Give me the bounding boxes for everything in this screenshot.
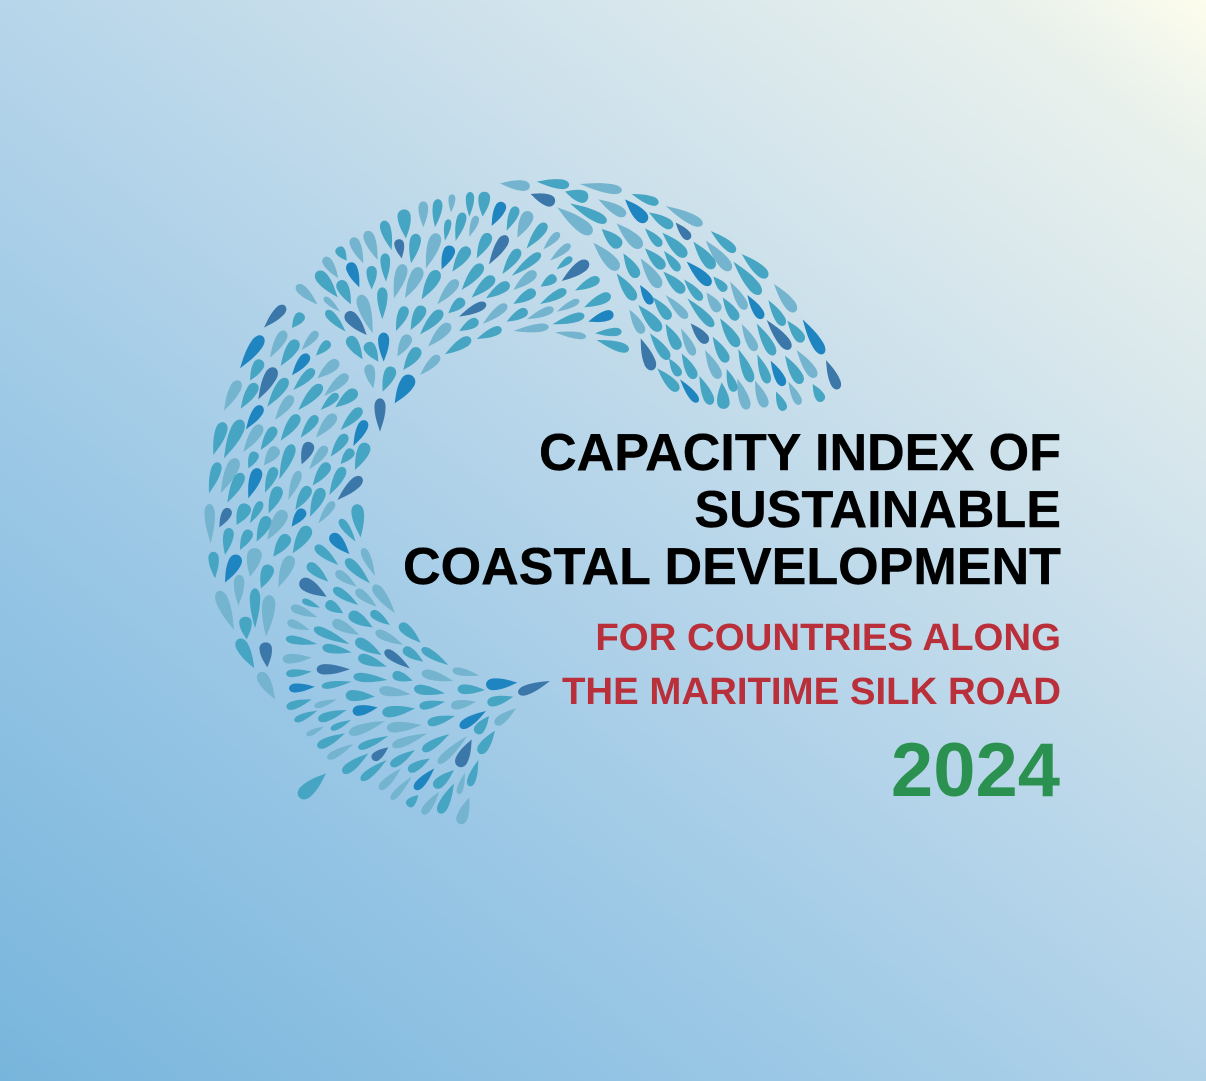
icon: circular swirl of water drops xyxy=(204,177,843,826)
subtitle: FOR COUNTRIES ALONG xyxy=(595,616,1061,659)
subtitle: THE MARITIME SILK ROAD xyxy=(562,670,1061,713)
subtitle xyxy=(562,616,1061,713)
title: COASTAL DEVELOPMENT xyxy=(403,538,1061,596)
lower tail of drops xyxy=(204,499,552,826)
title xyxy=(403,424,1061,596)
upper-left arc of drops xyxy=(204,191,536,519)
year: 2024 xyxy=(891,728,1060,813)
title: CAPACITY INDEX OF xyxy=(539,424,1061,482)
upper-right arc of drops xyxy=(499,177,843,412)
title: SUSTAINABLE xyxy=(694,481,1061,539)
